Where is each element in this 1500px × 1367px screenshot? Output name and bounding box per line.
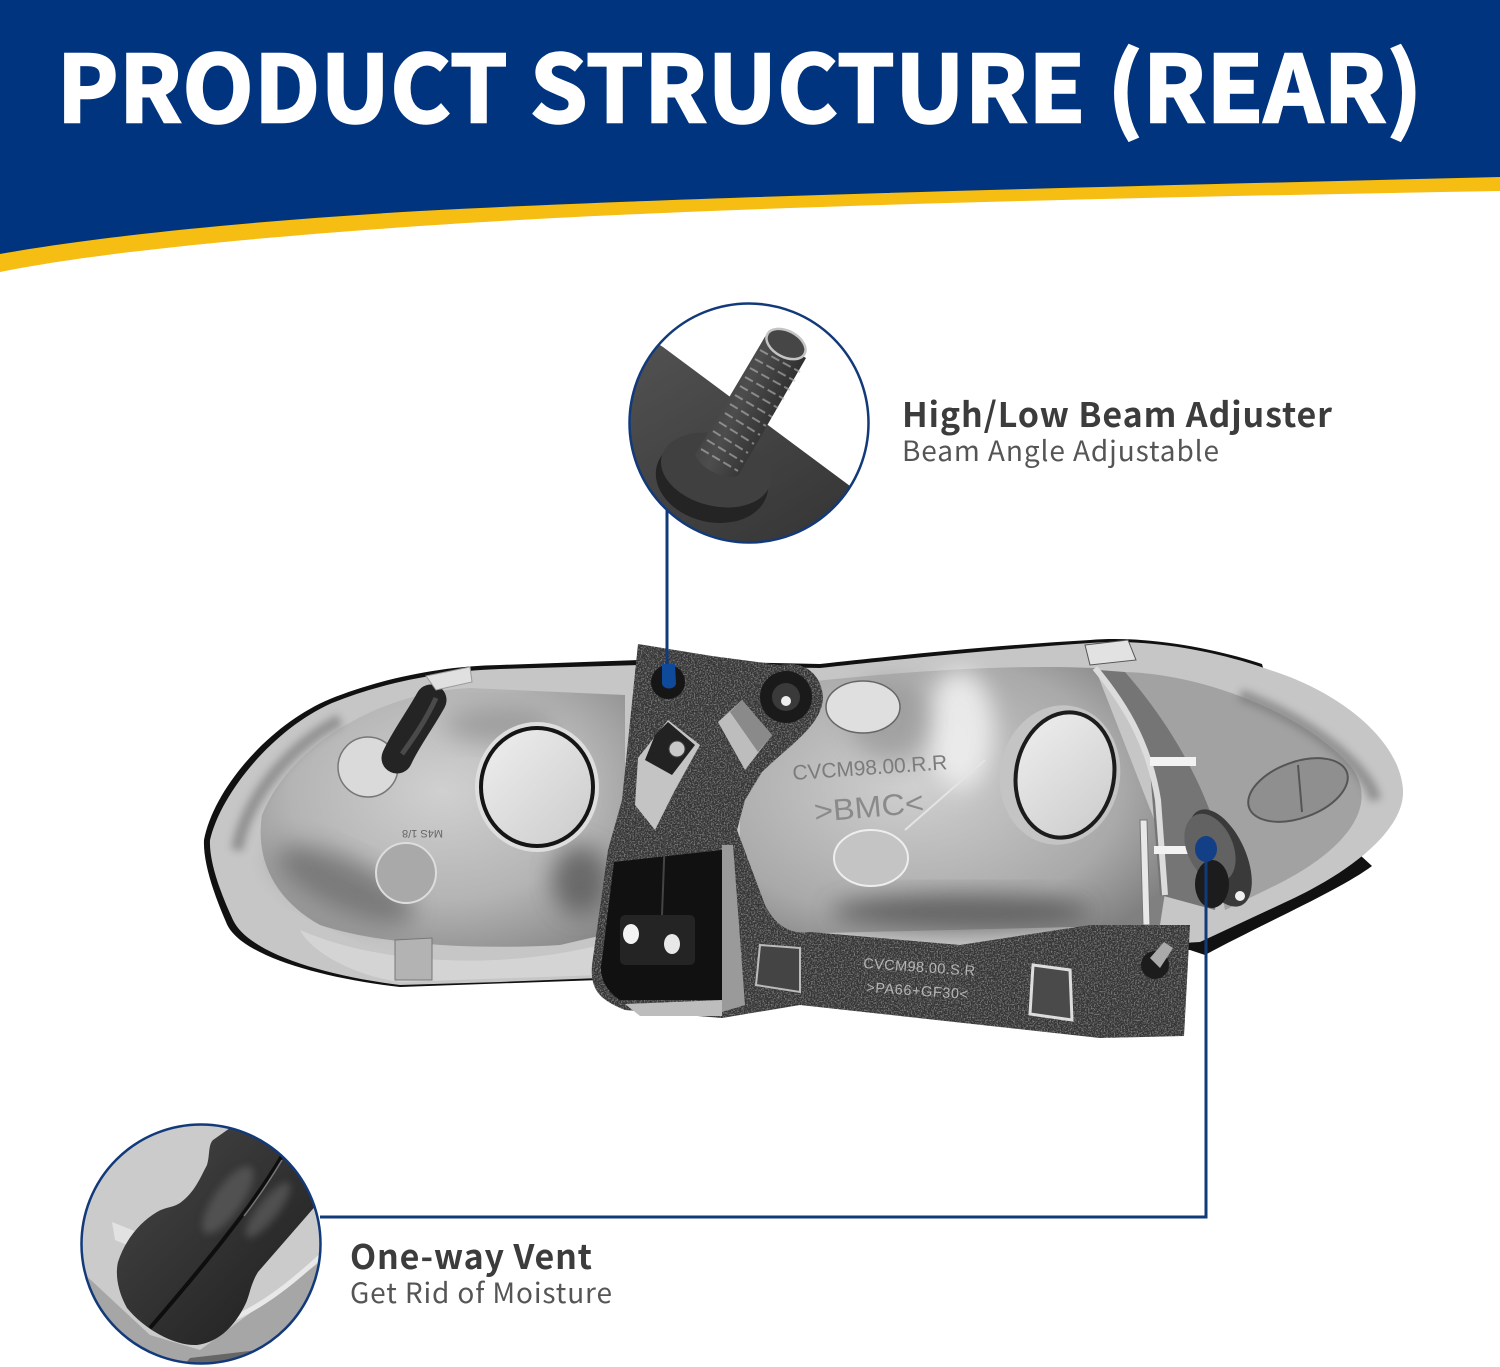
headlight rear view [200,630,1410,1038]
left bulb cover [481,728,593,846]
blue leader lines [320,508,1206,1217]
callout circle: beam adjuster detail [620,303,869,560]
heading: one-way vent: One-way Vent [350,1230,592,1279]
lower lip [300,930,600,982]
left vent hose [397,700,431,758]
lower bracket clips [756,945,800,992]
moulded text: CVCM98.00.R.R [792,751,948,785]
moulded discs [338,737,398,797]
bracket square cut with screw [635,720,700,830]
left bulb [475,722,599,852]
rubber grommet [760,671,812,723]
headlight rear view: >BMC< [813,787,925,829]
heading: beam adjuster: High/Low Beam Adjuster [902,388,1332,437]
headlight black rim [204,639,1372,987]
vent rubber [117,1128,325,1345]
title: PRODUCT STRUCTURE (REAR) [57,16,1422,149]
marker dot: vent [1195,836,1217,862]
blotches [268,834,422,934]
yellow swoosh [0,177,1500,272]
sub text: one-way vent: Get Rid of Moisture [350,1272,612,1312]
header banner [0,0,1500,272]
right bulb cover [1006,704,1124,846]
moulded line [905,760,985,830]
stud on right of bracket [1141,942,1173,979]
bracket moulded text: CVCM98.00.S.R [863,956,976,980]
sub text: beam adjuster: Beam Angle Adjustable [902,430,1219,470]
terminal connector [620,915,695,965]
right bulb socket [989,696,1131,854]
right reflector section [1120,672,1362,910]
bracket slot cut [718,700,772,770]
right stem and tabs [1150,757,1196,854]
clips [426,667,472,690]
callout circle: one-way vent detail [80,1124,330,1367]
headlight rear view: >PA66+GF30< [866,980,969,1003]
bracket dark terminal box [601,850,722,1000]
background lens band [88,1264,318,1362]
lens housing [200,630,1410,990]
adjuster stud [651,665,685,699]
headlight rear view: M4S 1/8 [402,827,443,839]
washer [656,454,768,523]
mounting bracket [592,644,1190,1038]
right vent hose [1174,800,1265,916]
threaded bolt [695,335,806,477]
dark plate [630,345,850,542]
marker dot: adjuster [662,664,676,688]
